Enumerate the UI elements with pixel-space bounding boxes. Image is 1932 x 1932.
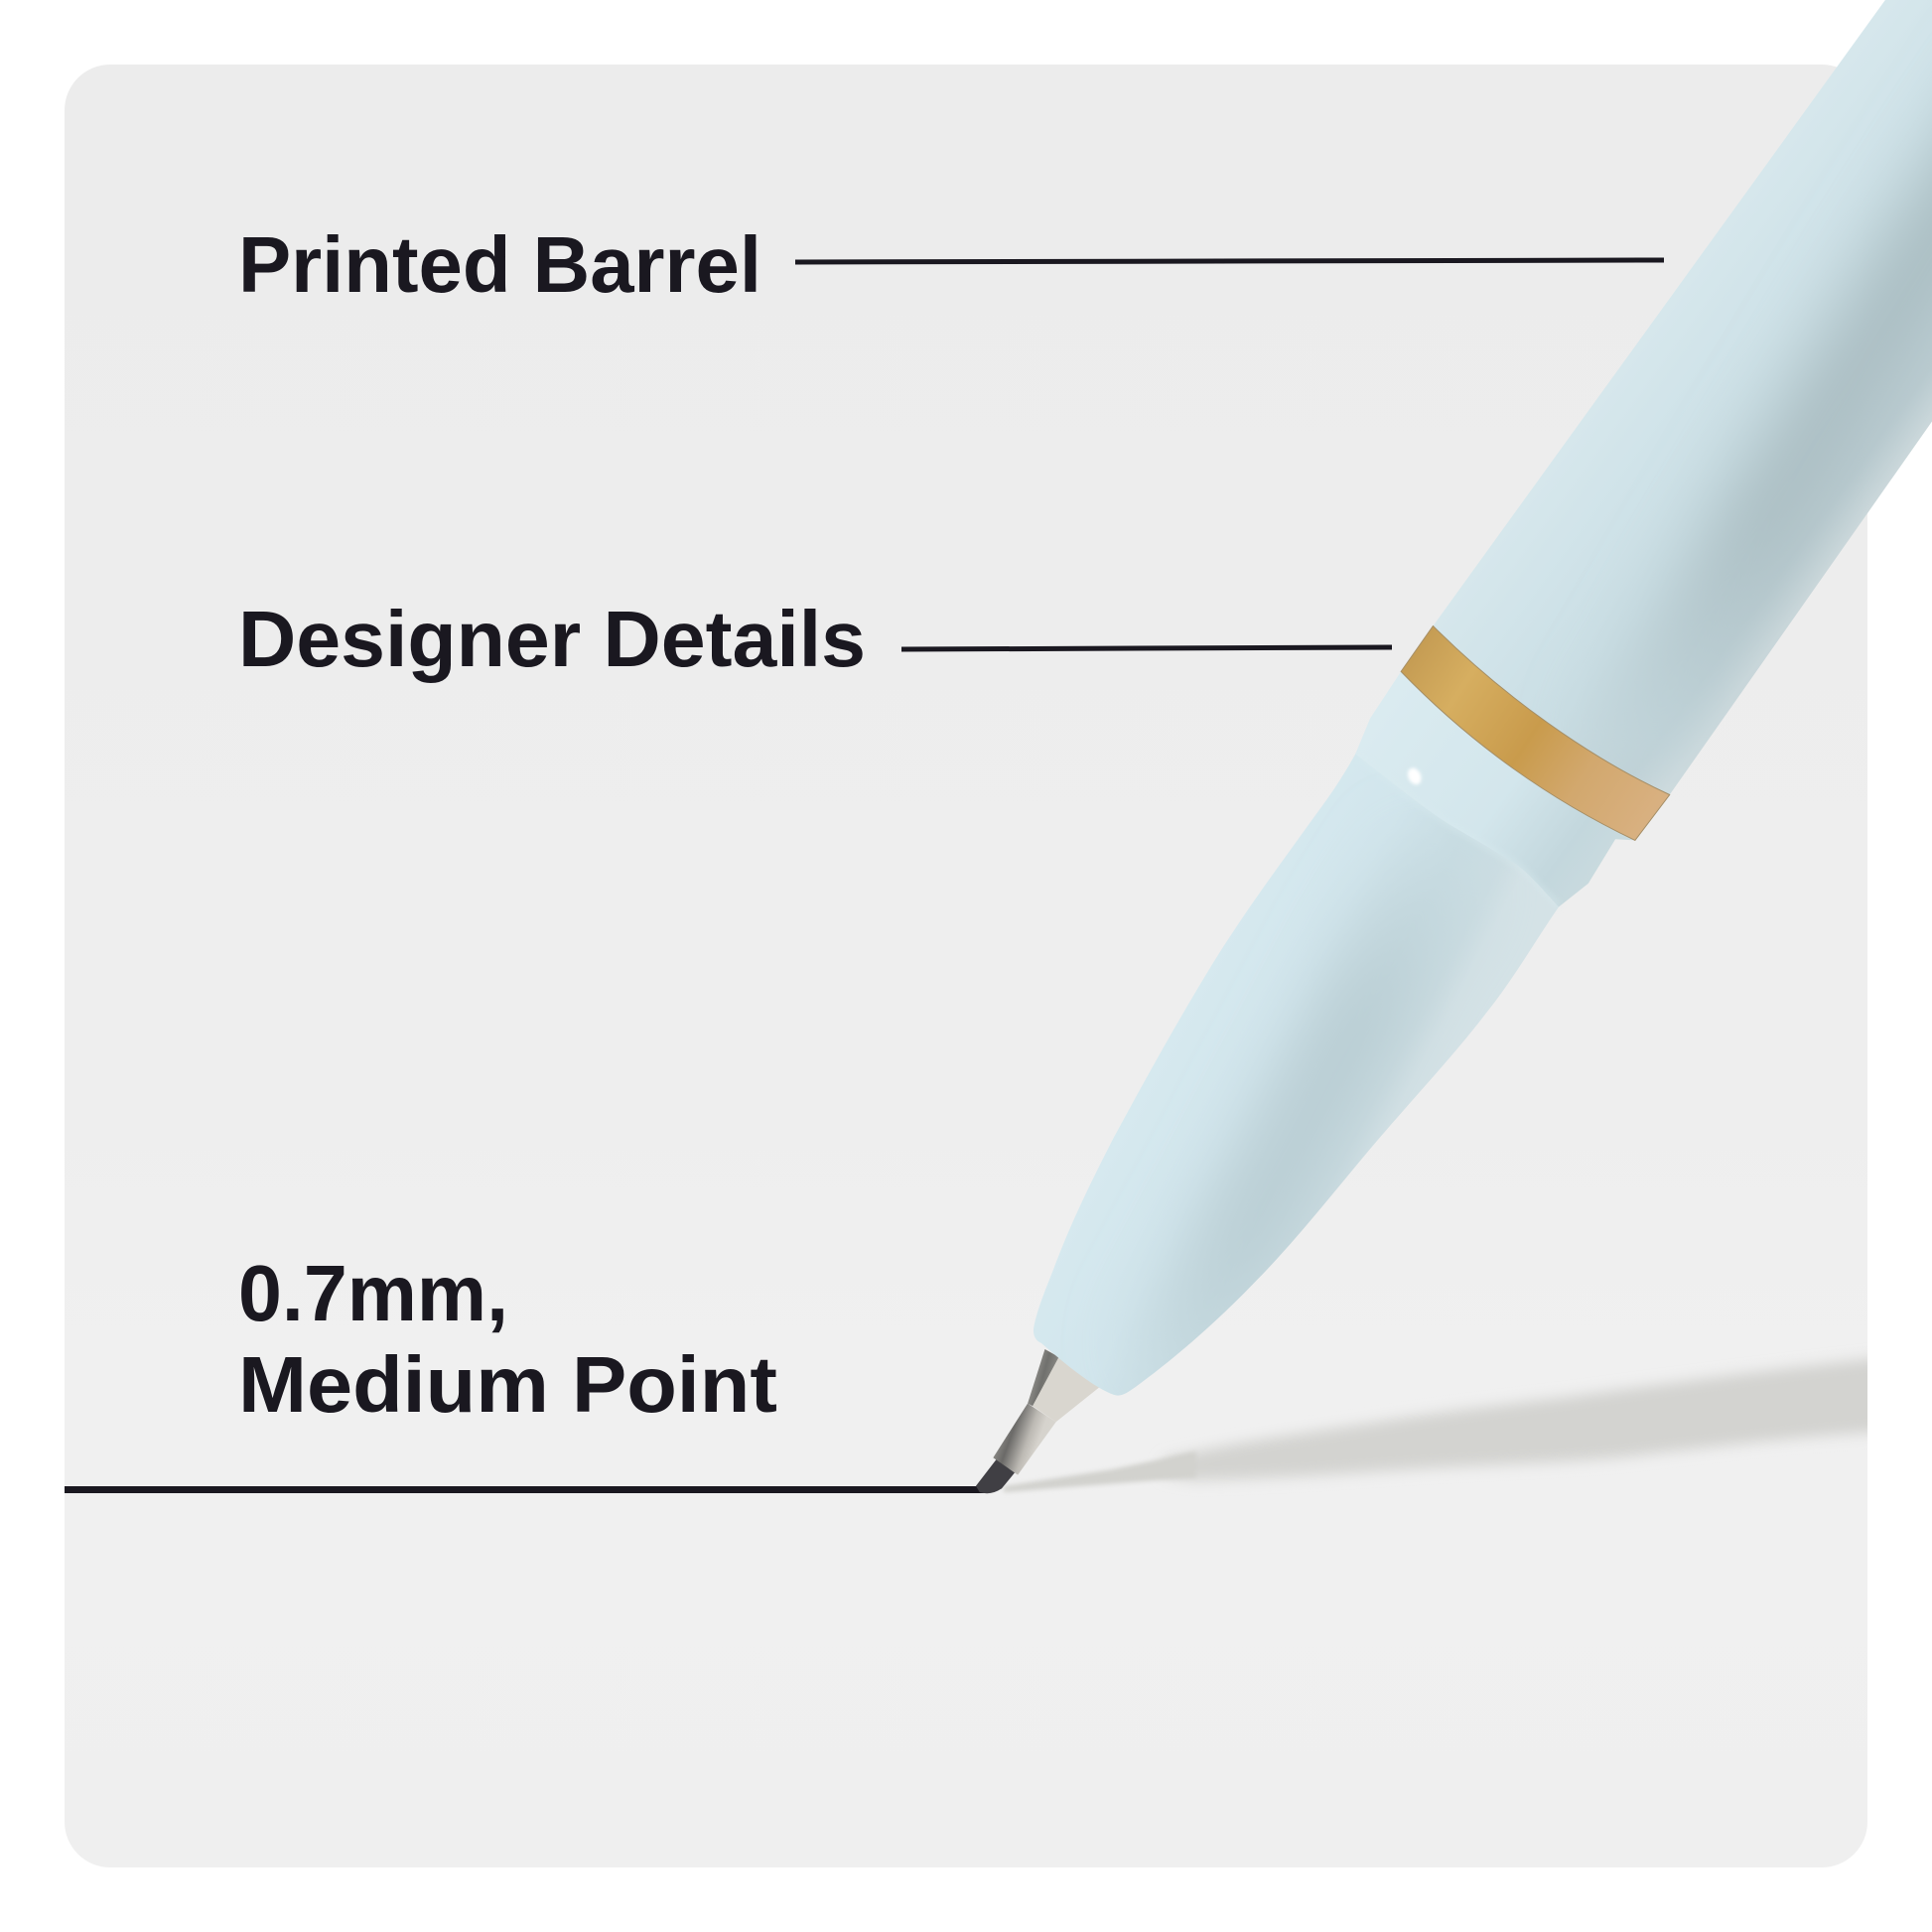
barrel shading stripe bbox=[1654, 119, 1932, 677]
grip ring bbox=[1355, 671, 1635, 906]
label: 0.7mm, Medium Point bbox=[238, 1249, 777, 1429]
pen nib bbox=[976, 1349, 1109, 1493]
nib metal sleeve bbox=[993, 1404, 1056, 1475]
label: Printed Barrel: Printed Barrel bbox=[238, 220, 761, 309]
label: 0.7mm, Medium Point: 0.7mm, bbox=[238, 1249, 508, 1337]
gold band bbox=[1401, 625, 1670, 840]
nib cone matte facet bbox=[1033, 1355, 1109, 1422]
body shading stripe bbox=[1175, 923, 1418, 1338]
leader line: Printed Barrel bbox=[795, 260, 1664, 262]
nib writing tip bbox=[976, 1453, 1018, 1493]
nib cone dark facet bbox=[1028, 1349, 1067, 1407]
ring highlight bbox=[1405, 765, 1424, 786]
pen shadow bbox=[1004, 1356, 1896, 1492]
label: Designer Details: Designer Details bbox=[238, 595, 866, 683]
upper printed barrel bbox=[1434, 0, 1932, 794]
pen illustration bbox=[976, 0, 1932, 1493]
shadow tail near nib bbox=[1004, 1451, 1196, 1492]
lower pen body bbox=[1034, 755, 1559, 1396]
ring soft edge line bbox=[1360, 758, 1559, 906]
leader line: Designer Details bbox=[901, 647, 1392, 649]
written ink line bbox=[65, 1486, 988, 1493]
label: 0.7mm, Medium Point: Medium Point bbox=[238, 1340, 777, 1429]
